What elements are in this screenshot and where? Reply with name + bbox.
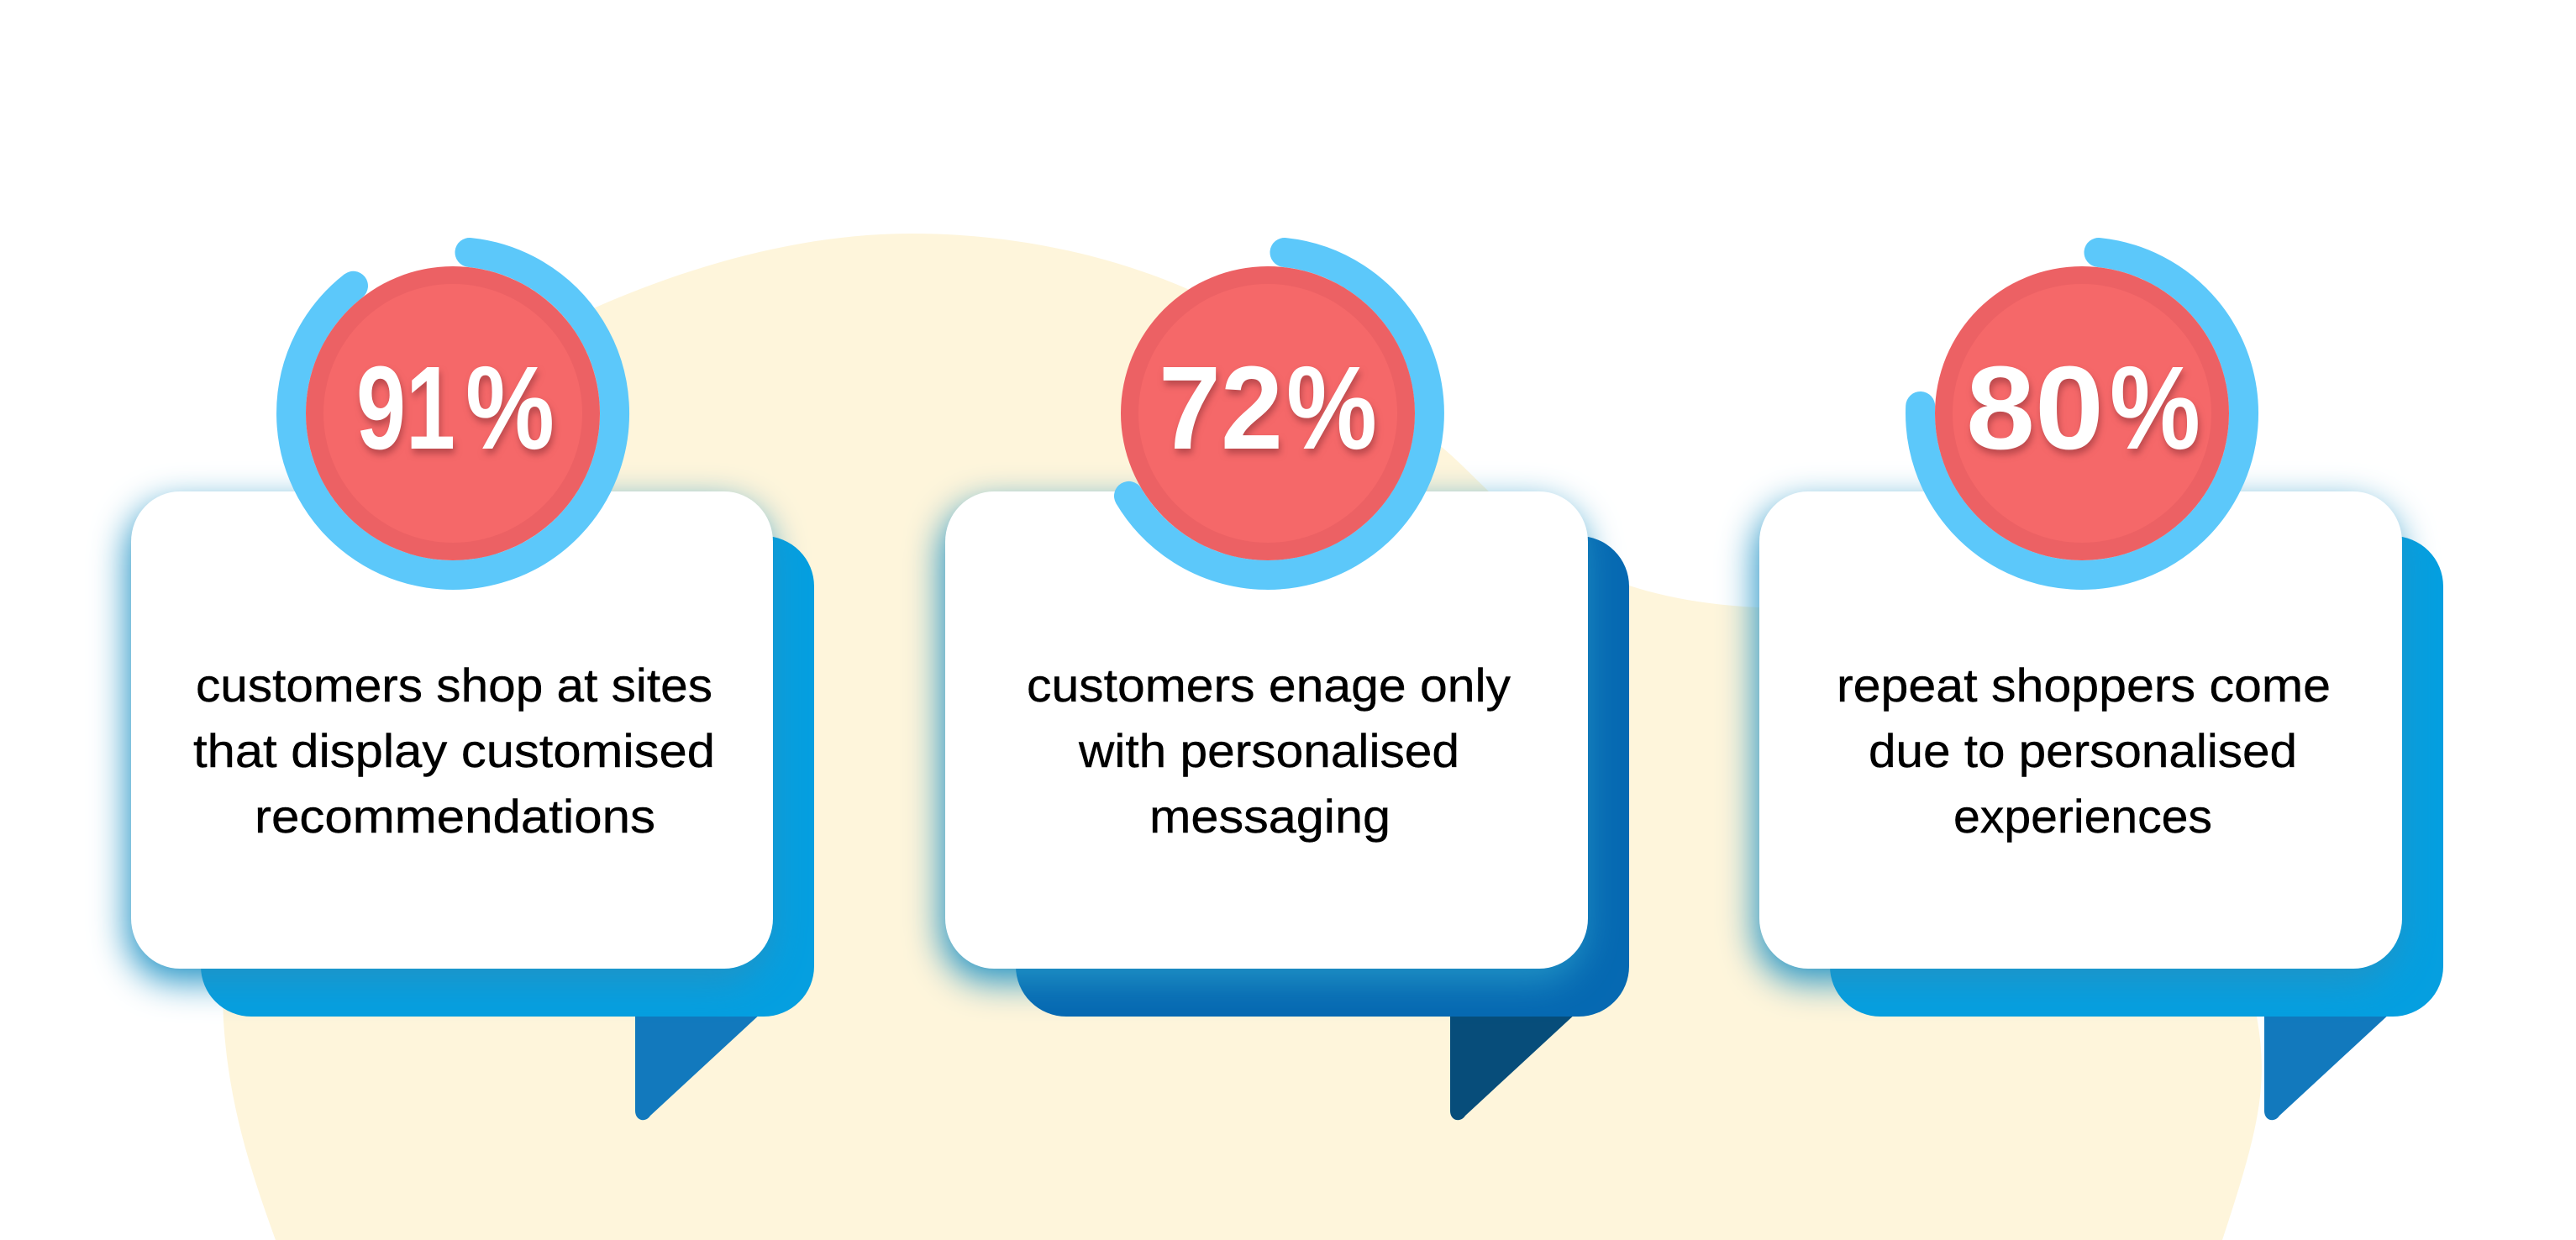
red circle outer 2 [1121, 266, 1415, 560]
speech bubble tail 2 [1450, 1012, 1577, 1120]
statistic 91%: % [465, 341, 555, 474]
statistic 80%: 80 [1966, 341, 2104, 474]
panel: card 2 [945, 252, 1629, 1120]
blue backing card 3 [1830, 536, 2443, 1017]
description 3: due to personalised [1869, 724, 2297, 777]
red circle inner 2 [1138, 284, 1397, 543]
statistic 72%: % [1286, 341, 1377, 474]
red circle inner 1 [323, 284, 582, 543]
progress ring 91% [292, 252, 615, 575]
description 2: messaging [1149, 790, 1391, 843]
speech bubble tail 1 [635, 1012, 762, 1120]
speech bubble tail 3 [2264, 1012, 2391, 1120]
red circle inner 3 [1953, 284, 2211, 543]
panel: card 3 [1759, 252, 2443, 1120]
panel: card 1 [131, 252, 814, 1120]
red circle outer 3 [1935, 266, 2229, 560]
statistic 80%: % [2110, 341, 2200, 474]
red circle outer 1 [306, 266, 600, 560]
description 3: repeat shoppers come [1837, 659, 2331, 712]
description 3 [1837, 659, 2331, 843]
white card 2 [945, 491, 1588, 969]
blue backing card 2 [1016, 536, 1629, 1017]
blue backing card 1 [201, 536, 814, 1017]
background blob [223, 234, 2262, 1240]
white card 3 [1759, 491, 2402, 969]
description 2: with personalised [1078, 724, 1459, 777]
description 1: recommendations [255, 790, 655, 843]
statistic 72%: 72 [1159, 341, 1283, 474]
description 2: customers enage only [1027, 659, 1511, 712]
white card 1 [131, 491, 773, 969]
description 2 [1027, 659, 1511, 843]
description 1 [193, 659, 715, 843]
progress ring 80% [1921, 252, 2244, 575]
statistic 91%: 91 [356, 341, 455, 474]
progress ring 72% [1129, 252, 1429, 575]
description 1: customers shop at sites [196, 659, 712, 712]
description 1: that display customised [193, 724, 715, 777]
description 3: experiences [1953, 790, 2212, 843]
